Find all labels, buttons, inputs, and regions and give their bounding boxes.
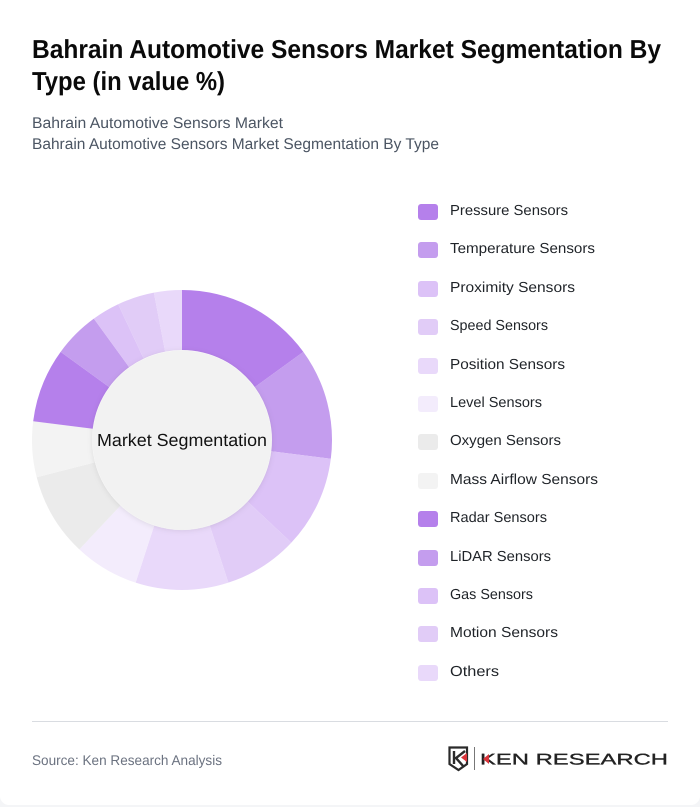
segment: Mass Airflow Sensors bbox=[32, 421, 95, 477]
legend item: Oxygen Sensors: Oxygen Sensors bbox=[450, 433, 561, 449]
segment: Oxygen Sensors bbox=[37, 462, 120, 549]
centre label: Market Segmentation bbox=[97, 430, 267, 450]
donut centre bbox=[92, 350, 272, 530]
legend item: LiDAR Sensors: LiDAR Sensors bbox=[450, 549, 551, 565]
segment: Position Sensors bbox=[136, 526, 228, 590]
segment: Level Sensors bbox=[79, 506, 154, 583]
legend item: Proximity Sensors: Proximity Sensors bbox=[450, 280, 575, 296]
segment: Others bbox=[154, 290, 182, 352]
segment: Pressure Sensors bbox=[182, 290, 303, 387]
segment: Gas Sensors bbox=[94, 304, 144, 367]
legend item: Level Sensors: Level Sensors bbox=[450, 395, 542, 411]
legend item: Position Sensors: Position Sensors bbox=[450, 357, 565, 373]
segment: Motion Sensors bbox=[118, 293, 165, 359]
title: Type (in value %) bbox=[32, 66, 225, 96]
segment: Radar Sensors bbox=[33, 352, 109, 429]
logo: Ken Research bbox=[450, 747, 668, 770]
legend item: Level Sensors bbox=[418, 395, 542, 412]
legend item: Others: Others bbox=[450, 664, 499, 680]
legend item: Radar Sensors: Radar Sensors bbox=[450, 510, 547, 526]
legend item: Gas Sensors bbox=[418, 587, 533, 604]
legend item: Temperature Sensors: Temperature Sensors bbox=[450, 241, 595, 257]
donut chart bbox=[32, 290, 332, 590]
legend item: Speed Sensors: Speed Sensors bbox=[450, 318, 548, 334]
source note: Source: Ken Research Analysis bbox=[32, 752, 222, 768]
segment: Proximity Sensors bbox=[248, 451, 331, 543]
legend item: Pressure Sensors: Pressure Sensors bbox=[450, 203, 568, 219]
legend item: Position Sensors bbox=[418, 357, 565, 374]
icon: shield bbox=[450, 748, 467, 770]
logo: Ken Research: KEN RESEARCH bbox=[480, 752, 668, 768]
legend item: Gas Sensors: Gas Sensors bbox=[450, 587, 533, 603]
legend item: Motion Sensors bbox=[418, 625, 558, 642]
legend bbox=[418, 203, 598, 681]
subtitle: Bahrain Automotive Sensors Market bbox=[32, 115, 284, 132]
legend item: Mass Airflow Sensors: Mass Airflow Sensors bbox=[450, 472, 598, 488]
icon: red K notch bbox=[483, 754, 489, 764]
legend item: Others bbox=[418, 664, 499, 681]
subtitle: Bahrain Automotive Sensors Market Segmentation By Type bbox=[32, 136, 439, 153]
title: Bahrain Automotive Sensors Market Segmentation By bbox=[32, 34, 661, 64]
title bbox=[32, 34, 661, 96]
segment: Temperature Sensors bbox=[255, 352, 332, 459]
legend item: Motion Sensors: Motion Sensors bbox=[450, 625, 558, 641]
segment: Speed Sensors bbox=[210, 502, 291, 583]
segment: LiDAR Sensors bbox=[61, 319, 129, 387]
subtitle bbox=[32, 115, 439, 153]
